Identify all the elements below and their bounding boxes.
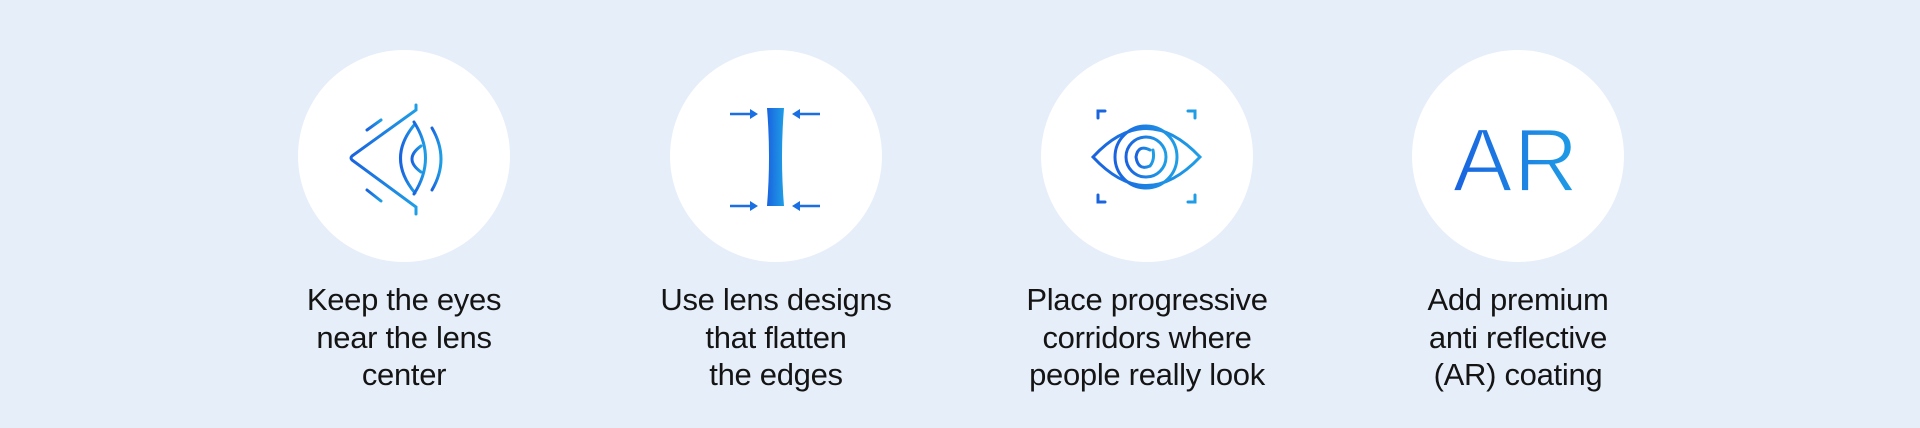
circle with lens icon	[670, 50, 882, 262]
panel: keep eyes near center	[298, 50, 510, 392]
caption: the edges	[709, 357, 843, 392]
panel: flatten edges	[660, 50, 892, 392]
circle with eye icon	[1041, 50, 1253, 262]
caption: near the lens	[316, 320, 492, 354]
caption	[660, 282, 892, 392]
caption: that flatten	[705, 320, 847, 354]
panel: AR coating	[1412, 50, 1624, 392]
caption: corridors where	[1042, 320, 1252, 354]
caption: anti reflective	[1429, 320, 1607, 354]
caption	[307, 282, 501, 392]
caption: (AR) coating	[1434, 357, 1602, 392]
caption: Keep the eyes	[307, 282, 501, 317]
caption: Add premium	[1427, 282, 1609, 317]
circle with AR icon: AR	[1452, 111, 1580, 211]
caption: center	[362, 357, 446, 392]
circle with eye side icon	[298, 50, 510, 262]
caption: Place progressive	[1026, 282, 1268, 317]
circle with AR icon	[1412, 50, 1624, 262]
panel: progressive corridors	[1026, 50, 1268, 392]
caption	[1427, 282, 1609, 392]
caption: people really look	[1029, 357, 1265, 392]
caption: Use lens designs	[660, 282, 892, 317]
caption	[1026, 282, 1268, 392]
